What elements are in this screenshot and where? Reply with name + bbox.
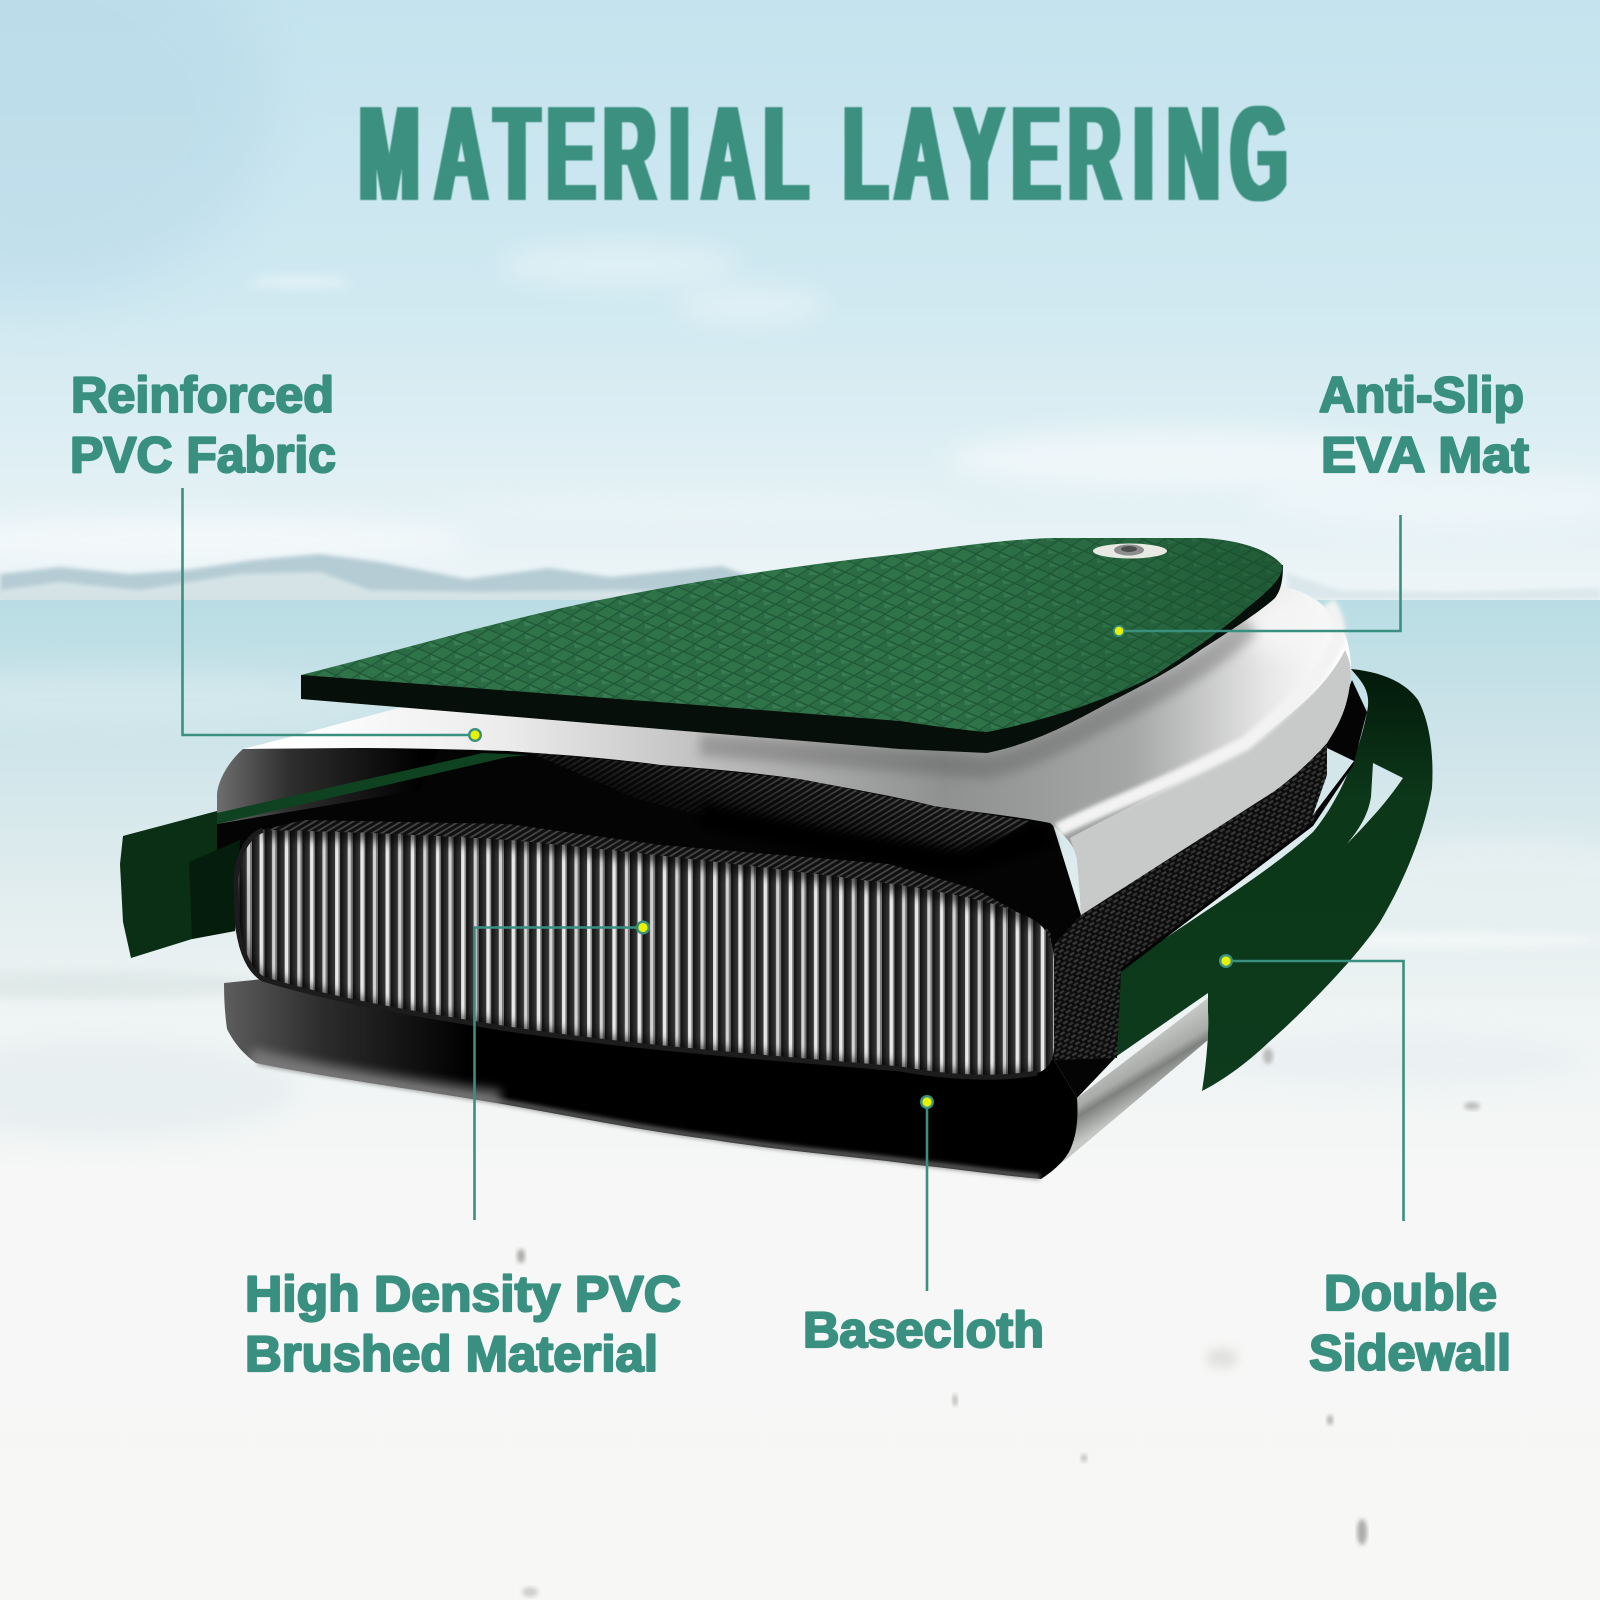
carbon-weave underside	[528, 752, 1030, 860]
title: MATERIAL LAYERING	[359, 78, 1287, 229]
high density brushed bristles panel	[230, 820, 1060, 1085]
callout: high density PVC brushed material: High Density PVC	[245, 1266, 681, 1322]
callout: double sidewall	[1219, 954, 1511, 1381]
anti-slip EVA mat edge	[301, 565, 1283, 753]
lower shell	[224, 979, 1077, 1179]
callout: reinforced PVC fabric	[70, 367, 482, 742]
callout: double sidewall: Double	[1324, 1265, 1497, 1321]
callout: anti-slip EVA mat: EVA Mat	[1321, 427, 1529, 483]
callout: anti-slip EVA mat: Anti-Slip	[1319, 367, 1524, 423]
woven band above bristles	[262, 820, 1054, 960]
callout: reinforced PVC fabric: Reinforced	[71, 367, 334, 423]
shell lower strip	[1070, 650, 1351, 915]
callout: reinforced PVC fabric: PVC Fabric	[70, 427, 336, 483]
green strip on left underside	[217, 753, 528, 824]
left green inner step	[189, 840, 240, 939]
shell white rib	[1058, 603, 1338, 830]
lower white strip	[1041, 998, 1208, 1178]
left green sidewall	[120, 811, 268, 958]
callout: basecloth: Basecloth	[803, 1302, 1044, 1358]
soft shadow over carbon edge	[700, 815, 1050, 862]
callout: double sidewall: Sidewall	[1309, 1325, 1511, 1381]
callout: anti-slip EVA mat	[1113, 367, 1529, 637]
callout: high density PVC brushed material: Brushed Material	[245, 1326, 658, 1382]
callout: high density PVC brushed material	[245, 920, 681, 1382]
callout: basecloth	[803, 1095, 1044, 1358]
mat shade	[950, 538, 1282, 732]
reinforced PVC white shell	[243, 560, 1351, 915]
woven right side	[1054, 745, 1327, 1060]
small gap seen through the layers	[1313, 748, 1354, 815]
lower shell soft edge	[258, 1062, 1040, 1177]
mountains	[0, 554, 1600, 600]
mat valve ring	[1093, 544, 1167, 558]
panel woven outline	[236, 830, 1037, 1077]
anti-slip EVA mat top	[301, 538, 1282, 732]
black inner body	[217, 680, 1367, 1098]
shell shading	[700, 593, 1336, 768]
illustration: paddle board layer cutaway	[120, 538, 1432, 1179]
lower shell lit band	[250, 1058, 500, 1100]
double sidewall: right green strip	[1117, 669, 1432, 1091]
upper-left shell interior	[217, 748, 440, 824]
